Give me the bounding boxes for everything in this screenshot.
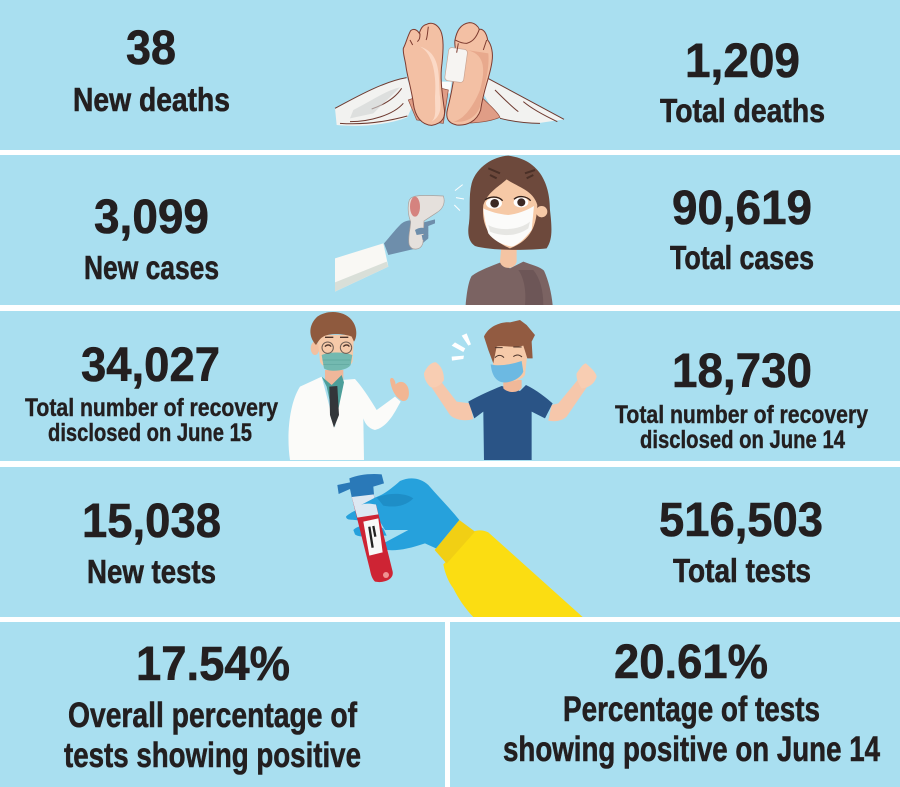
total tests figure: Total tests — [673, 552, 811, 589]
total deaths figure: Total deaths — [660, 92, 825, 129]
panel: deaths — [0, 0, 900, 150]
panel: recoveries — [0, 311, 900, 461]
panel: cases — [0, 155, 900, 305]
total tests figure: 516,503 — [659, 494, 823, 547]
total deaths figure: 1,209 — [685, 35, 800, 88]
panel: overall positive percentage: Overall percentage of — [68, 696, 357, 735]
new cases figure: 3,099 — [94, 191, 209, 244]
new cases figure — [84, 191, 219, 286]
total cases figure: Total cases — [670, 239, 814, 276]
icon: feet with toe tag — [335, 23, 564, 126]
new deaths figure: 38 — [126, 22, 176, 75]
new deaths figure — [73, 22, 230, 118]
new tests figure: New tests — [87, 553, 216, 590]
new tests figure: 15,038 — [82, 495, 221, 548]
panel: positive percentage on June 14: 20.61% — [614, 636, 768, 689]
recovery disclosed June 15: Total number of recovery — [25, 394, 278, 422]
recovery disclosed June 15: 34,027 — [81, 339, 220, 392]
icon: doctor thumbs up — [288, 312, 409, 460]
total cases figure: 90,619 — [672, 182, 812, 235]
total deaths figure — [660, 35, 825, 129]
recovery disclosed June 14 — [615, 345, 868, 454]
icon: woman wearing mask — [466, 156, 553, 305]
icon: recovered man cheering — [424, 320, 597, 460]
panel: overall positive percentage: tests showing positive — [64, 736, 361, 775]
new tests figure — [82, 495, 221, 590]
recovery disclosed June 15 — [25, 339, 278, 447]
icon: gloved hand holding blood sample — [337, 474, 583, 617]
icon: gloved hand with thermometer — [335, 185, 464, 292]
total tests figure — [659, 494, 823, 589]
new deaths figure: New deaths — [73, 81, 230, 118]
recovery disclosed June 14: disclosed on June 14 — [640, 426, 845, 454]
panel: positive percentage on June 14: Percentage of tests — [563, 690, 820, 729]
recovery disclosed June 15: disclosed on June 15 — [48, 419, 252, 447]
recovery disclosed June 14: 18,730 — [672, 345, 812, 398]
panel: overall positive percentage: 17.54% — [136, 638, 290, 691]
panel: tests — [0, 467, 900, 617]
panel: overall positive percentage — [0, 622, 445, 787]
panel: positive percentage on June 14 — [450, 622, 900, 787]
new cases figure: New cases — [84, 249, 219, 286]
total cases figure — [670, 182, 814, 276]
